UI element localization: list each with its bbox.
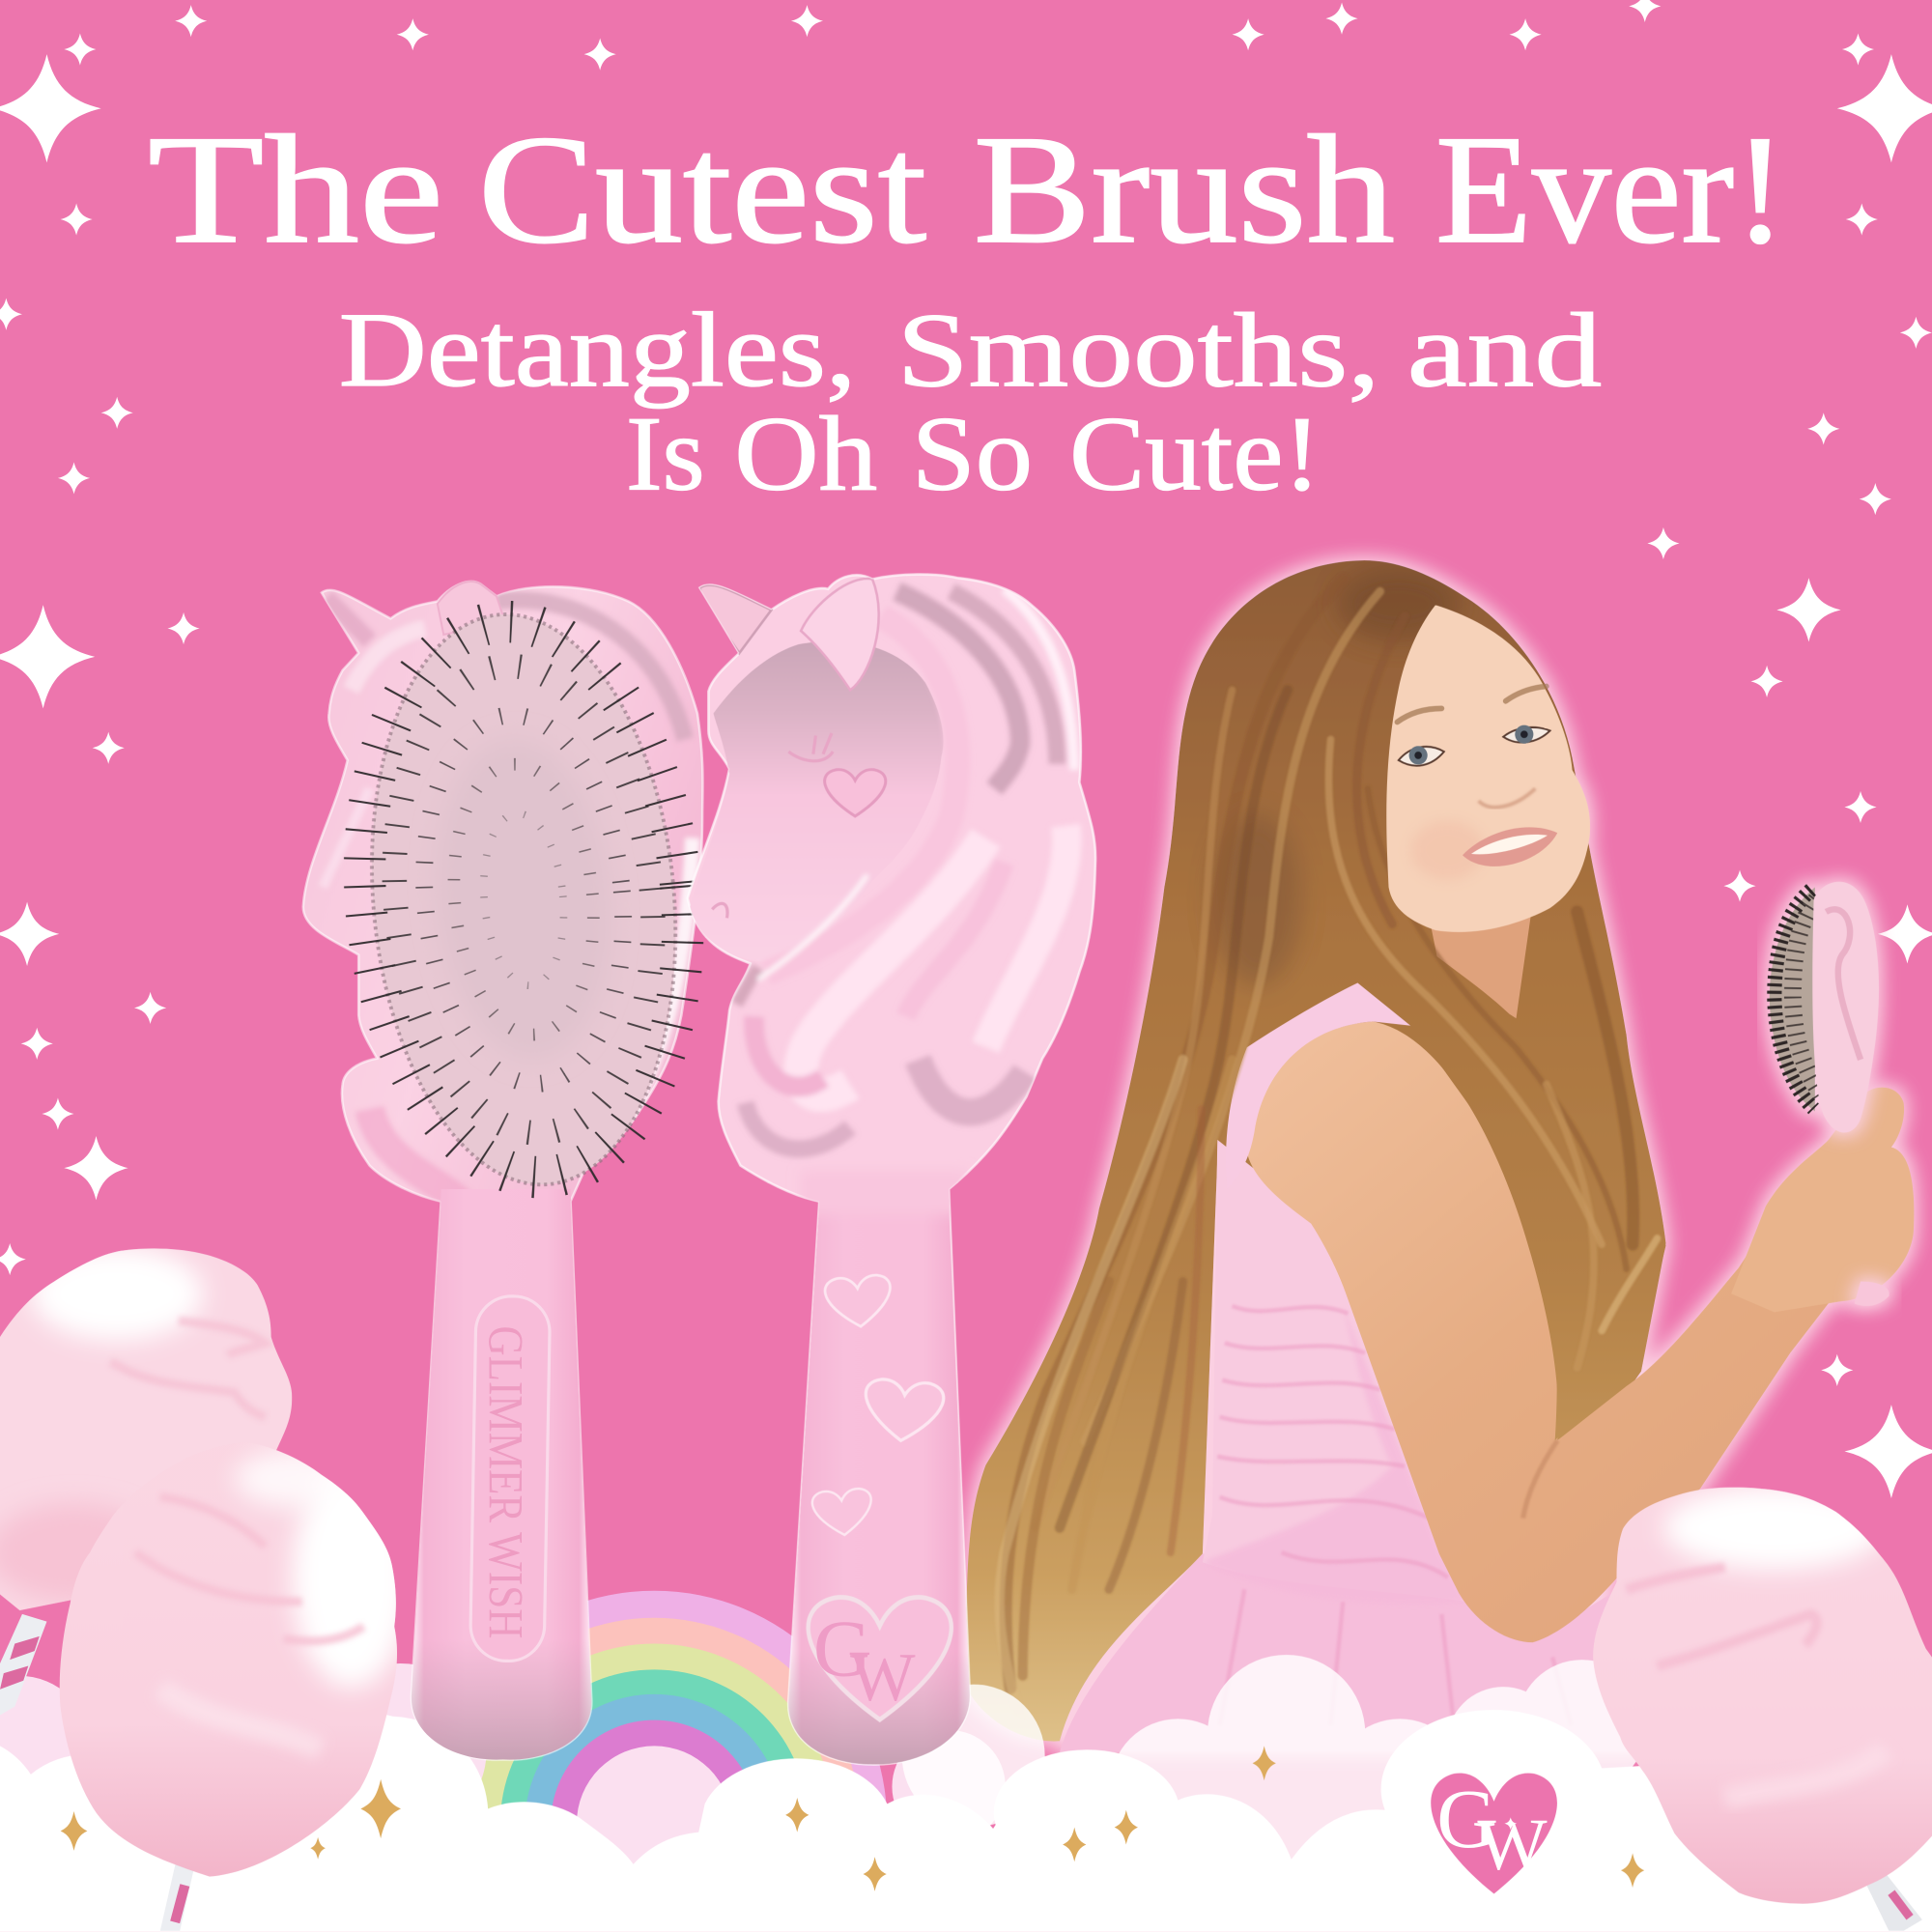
candy stick right xyxy=(1864,1873,1922,1931)
left handle logo plate xyxy=(470,1295,551,1662)
arm and shoulder xyxy=(1246,1021,1836,1642)
face xyxy=(1386,605,1590,932)
handle heart logo xyxy=(809,1598,952,1719)
arm fold shadow xyxy=(1523,1440,1557,1518)
brand logo heart: G xyxy=(1436,1773,1497,1865)
right brush handle xyxy=(788,1202,970,1765)
left brush metallic highlights xyxy=(323,598,693,1213)
subtitle: So xyxy=(912,394,1033,512)
small brush in hand xyxy=(1770,882,1889,1306)
left brush: bristle side xyxy=(303,582,706,1765)
subtitle: Smooths, xyxy=(897,291,1380,409)
handle heart logo: G xyxy=(813,1605,872,1694)
back clouds xyxy=(0,1663,1006,1843)
title: Cutest xyxy=(478,103,926,275)
ear xyxy=(801,579,879,690)
cotton candy right xyxy=(1589,1485,1932,1906)
cotton candy left back xyxy=(0,1244,296,1614)
dress bodice xyxy=(1203,1140,1466,1602)
title: The xyxy=(148,103,443,275)
handle hearts xyxy=(811,1274,945,1538)
handle heart logo: W xyxy=(850,1639,916,1716)
subtitle: and xyxy=(1407,291,1602,409)
brand logo heart xyxy=(1431,1773,1557,1893)
bristles as radial ticks xyxy=(342,609,705,1191)
brush pad xyxy=(342,601,706,1198)
mane bands xyxy=(737,589,1074,1149)
subtitle: Oh xyxy=(734,394,877,512)
solid white clouds xyxy=(0,1710,1932,1932)
subtitle xyxy=(339,291,1602,512)
tulle ruffles at waist xyxy=(1203,1306,1466,1604)
title: Ever! xyxy=(1435,103,1786,275)
eyebrows xyxy=(1397,686,1547,722)
cotton candy left front xyxy=(49,1435,411,1882)
brush body xyxy=(1812,882,1879,1133)
subtitle: Cute! xyxy=(1069,394,1321,512)
left brush ear xyxy=(438,582,505,635)
hair strands xyxy=(999,567,1658,1725)
rainbow xyxy=(421,1591,887,1886)
dress ruffle texture xyxy=(1217,1306,1571,1725)
ruffle shoulder strap xyxy=(1226,976,1417,1189)
back hair xyxy=(966,560,1665,1742)
eyes xyxy=(1399,725,1550,766)
front hair strand over shoulder xyxy=(1277,603,1665,1440)
title: Brush xyxy=(974,103,1395,275)
cheek shading xyxy=(1410,820,1485,880)
horn xyxy=(699,585,771,653)
girl xyxy=(966,560,1914,1752)
bristles xyxy=(1770,887,1815,1112)
candy stick upper left xyxy=(0,1614,46,1716)
candy stick lower left xyxy=(160,1861,195,1931)
left handle wordmark: GLIMMER WISH xyxy=(477,1325,531,1638)
unicorn face panel xyxy=(690,641,944,962)
white sparkle stars xyxy=(0,0,1932,1498)
neck xyxy=(1430,894,1534,1041)
title xyxy=(148,103,1786,275)
eyelashes and nostril xyxy=(712,733,833,918)
handle neck blend xyxy=(801,1171,967,1215)
right brush: unicorn side xyxy=(688,575,1095,1767)
mouth xyxy=(1463,827,1557,867)
dress skirt xyxy=(1060,1548,1638,1752)
subtitle: Is xyxy=(626,394,705,512)
brand logo heart: W xyxy=(1477,1804,1548,1886)
cheek heart xyxy=(825,770,886,816)
translucent white clouds xyxy=(902,1655,1647,1861)
gold stars xyxy=(61,1746,1644,1891)
left brush handle xyxy=(412,1189,591,1760)
subtitle: Detangles, xyxy=(339,291,856,409)
nose xyxy=(1479,788,1535,808)
hand xyxy=(1731,1088,1914,1312)
